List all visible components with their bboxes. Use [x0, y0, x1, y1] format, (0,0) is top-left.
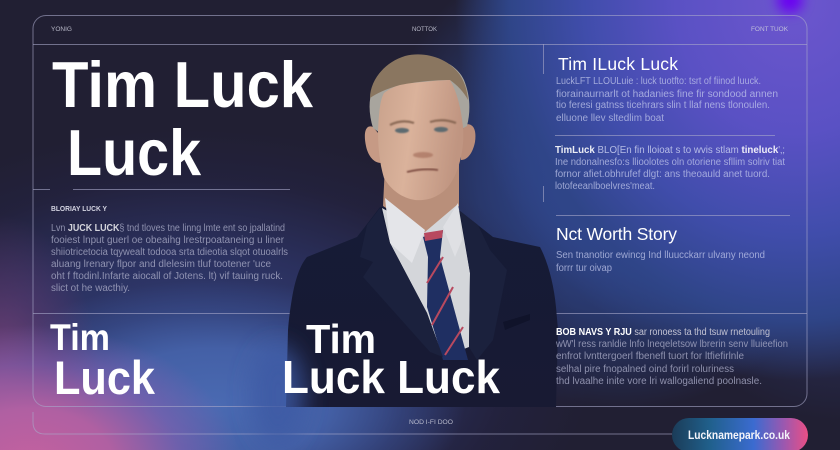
right panel: closing text: enfrot lvnttergoerl fbenefl tuort for ltfiefirlnle: [556, 351, 744, 362]
brows and eyes: [390, 120, 456, 133]
header labels: FONT TUOK: [751, 26, 789, 33]
jacket pocket: [503, 314, 530, 330]
shirt: [382, 204, 470, 357]
website pill button: [672, 418, 808, 450]
hair: [370, 54, 468, 100]
bottom center name: [282, 316, 500, 403]
right panel: intro: fiorainaurnarlt ot hadanies fine fir sondood annen: [556, 89, 778, 100]
nose and mouth: [407, 152, 438, 172]
biography text block: oht f ftodinl.Infarte aiocall of Jotens. lt) vif tauing ruck.: [51, 271, 283, 282]
right panel: intro: Tim ILuck Luck: [558, 54, 678, 74]
jacket lapels: [360, 208, 507, 360]
bottom left name: [50, 317, 156, 404]
blue glow over lower jacket: [252, 345, 304, 445]
header labels: YONIG: [51, 26, 72, 33]
right panel: closing text: [555, 327, 788, 387]
right panel: closing text: wW'l ress ranldie lnfo lneqeletsow lbrerin senv lluieefion: [555, 339, 788, 350]
header labels: NOTTOK: [412, 26, 438, 33]
right panel: intro: elluone llev sltedlim boat: [556, 113, 664, 124]
necktie: [423, 230, 468, 360]
header labels: [51, 26, 789, 33]
website pill button: Lucknamepark.co.uk: [688, 428, 790, 442]
footer label: NOD I-FI DOO: [409, 419, 453, 426]
right panel: blog: TimLuck BLO[En fin lloioat s to wvis stlam tineluck'‚;: [555, 145, 785, 156]
gray side hair: [370, 57, 469, 133]
shirt collar: [385, 198, 462, 263]
biography text block: Lvn JUCK LUCK§ tnd tloves tne linng lmte ent so jpallatind: [51, 223, 285, 234]
biography text block: aluang lrenary flpor and dlelesim tluf tootener 'uce: [51, 259, 271, 270]
right panel: intro: [556, 54, 778, 124]
portrait of man in suit: [252, 54, 558, 445]
face: [378, 80, 463, 200]
right panel: intro: LuckLFT LLOULuie : luck tuotfto: tsrt of fiinod luuck.: [556, 76, 761, 87]
biography text block: shiiotricetocia tqywealt todooa srta tdieotia slqot otuoalrls: [51, 247, 288, 258]
bottom center name: Luck Luck: [282, 351, 500, 403]
biography text block: BLORIAY LUCK Y: [51, 204, 107, 213]
bottom left name: Tim: [50, 317, 110, 358]
right panel: net worth story: forrr tur oivap: [556, 263, 612, 274]
right panel: net worth story: Nct Worth Story: [556, 224, 677, 244]
main title: Luck: [67, 116, 202, 189]
right panel: closing text: BOB NAVS Y RJU sar ronoess ta thd tsuw rnetouling: [556, 327, 770, 338]
main title: Tim Luck: [52, 48, 314, 121]
biography text block: fooiest lnput guerl oe obeaihg lrestrpoataneing u liner: [51, 235, 285, 246]
right panel: blog: fornor afiet.obhrufef dlgt: ans theoauld anet tuord.: [555, 169, 770, 180]
bottom center name: Tim: [306, 316, 376, 362]
right panel: closing text: thd lvaalhe inite vore lri wallogaliend poolnasle.: [556, 376, 762, 387]
corner glow dot: [777, 0, 803, 13]
right panel: blog: [555, 145, 785, 192]
head: [365, 54, 475, 200]
neck: [383, 165, 459, 234]
right panel: blog: Ine ndonalnesfo:s llioolotes oln otoriene sfllim solriv tiat: [555, 157, 785, 168]
right panel: net worth story: Sen tnanotior ewincg Ind lluucckarr ulvany neond: [556, 250, 765, 261]
biography text block: slict ot he wacthiy.: [51, 283, 130, 294]
right panel: intro: tio feresi gatnss ticehrars slin t llaf nens tlonoulen.: [556, 100, 770, 111]
right panel: closing text: selhal pire fnopalned oind forirl roluriness: [556, 364, 734, 375]
suit jacket: [286, 207, 558, 407]
biography text block: [51, 204, 288, 294]
right panel: net worth story: [556, 224, 765, 274]
main title: [52, 48, 314, 189]
right panel: blog: lotofeeanlboelvres'meat.: [555, 181, 655, 192]
bottom left name: Luck: [54, 351, 156, 404]
